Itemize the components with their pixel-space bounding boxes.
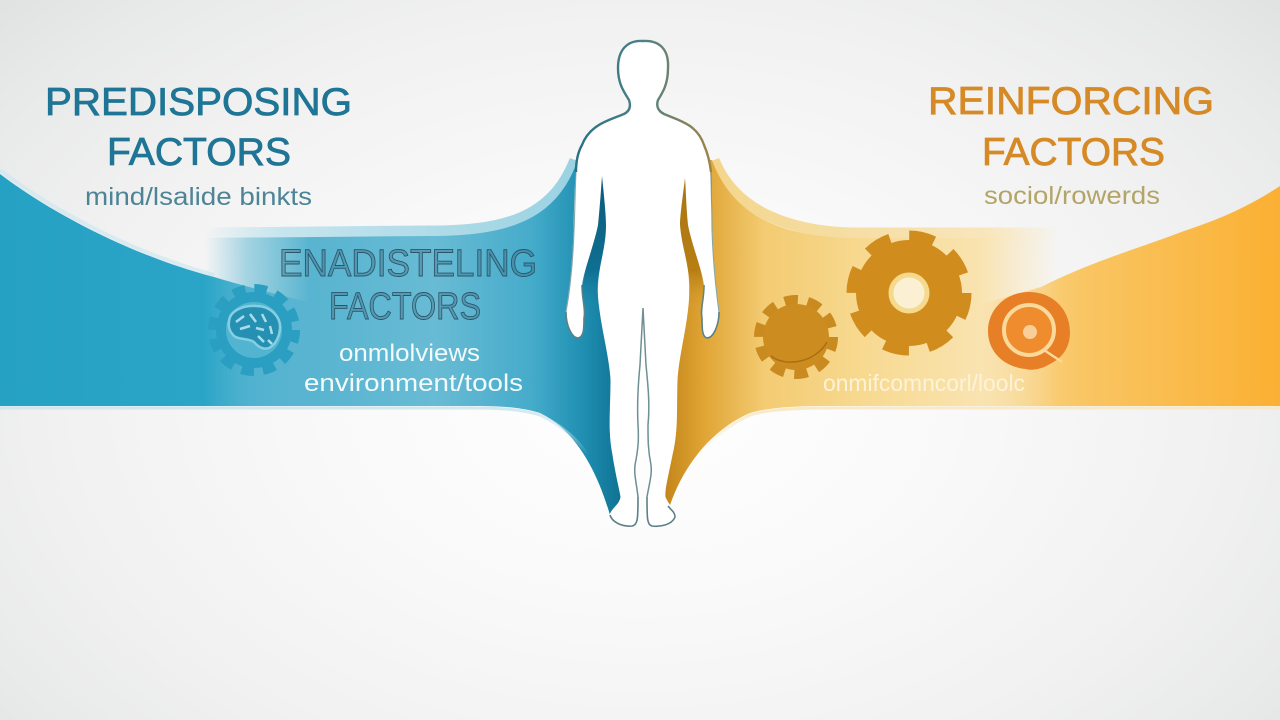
dark wedge: right torso shadow [680,178,704,310]
heading: predisposing factors: FACTORS [107,131,291,174]
icon: large orange gear [855,239,963,347]
arm outlines [566,172,719,312]
heading: enabling factors: FACTORS [329,286,481,328]
heading: reinforcing factors: REINFORCING [928,80,1214,123]
text: predisposing subtitle: mind/lsalide binkts [85,183,312,211]
body fill [566,41,719,526]
dark wedge: left torso shadow [582,176,606,310]
heading: enabling factors: ENADISTELING [279,243,537,285]
heading: reinforcing factors: FACTORS [982,131,1165,174]
icon: human silhouette [566,41,719,526]
text: enabling subtitle: environment/tools [304,370,523,397]
text: enabling subtitle: onmlolviews [339,340,480,367]
heading: enabling factors [279,243,537,328]
heading: reinforcing factors [928,80,1214,174]
text: reinforcing subtitle: sociol/rowerds [984,182,1160,210]
icon: orange target bubble [988,292,1070,370]
icon: small orange gear [760,301,832,373]
text: enabling subtitle [304,340,523,397]
heading: predisposing factors: PREDISPOSING [45,81,352,124]
icon: brain gear [213,289,295,371]
heading: predisposing factors [45,81,352,174]
panel: orange ribbon [665,160,1280,522]
hand and foot outlines [566,285,719,526]
text: reinforcing tools label: onmifcomncorl/loolc [823,370,1025,396]
inner leg line [635,308,651,497]
panel: blue ribbon [0,160,625,522]
head and shoulders outline [576,41,711,172]
